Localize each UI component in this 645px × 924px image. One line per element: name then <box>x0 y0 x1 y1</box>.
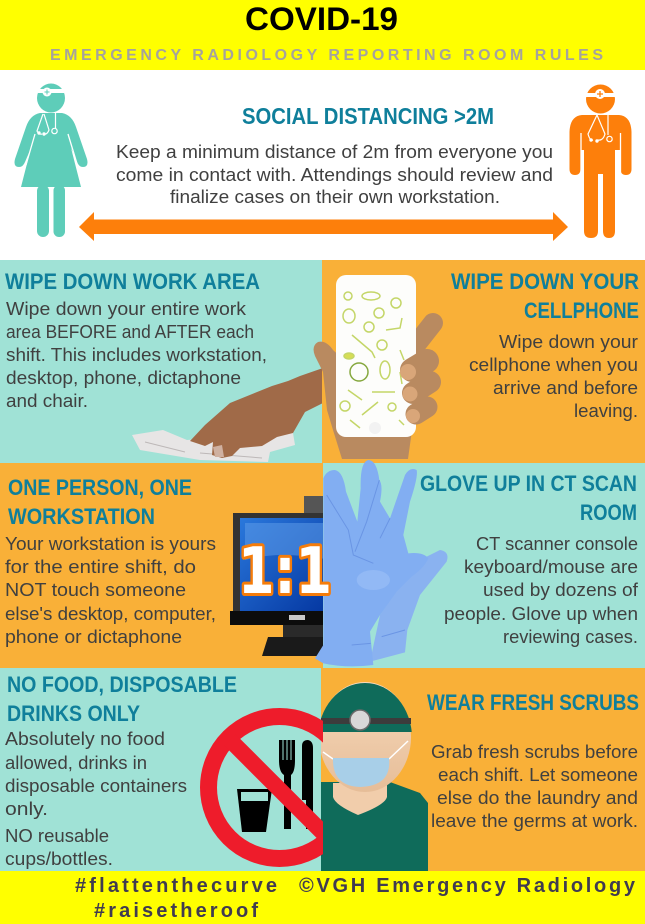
text: wipe work area body: desktop, phone, dictaphone <box>6 367 241 388</box>
text: wipe work area body: area BEFORE and AFTER each <box>6 321 254 342</box>
text: workstation body <box>5 533 216 647</box>
text: wipe work area body: Wipe down your entire work <box>6 298 247 319</box>
text: cellphone heading <box>451 269 639 323</box>
text: scrubs body <box>431 741 638 831</box>
text: no food body: NO reusable <box>5 825 109 846</box>
text: no food heading <box>7 672 237 726</box>
icon: male doctor <box>570 84 632 238</box>
icon: hand wiping with tissue <box>132 368 323 462</box>
subtitle: EMERGENCY RADIOLOGY REPORTING ROOM RULES <box>50 47 603 64</box>
text: wipe work area heading: WIPE DOWN WORK AREA <box>5 269 260 294</box>
label: 1:1 badge: 1:1 <box>238 535 332 609</box>
text: cellphone body: cellphone when you <box>469 354 638 375</box>
text: wipe work area body: and chair. <box>6 390 88 411</box>
text: workstation heading: WORKSTATION <box>8 504 155 529</box>
text: glove body: used by dozens of <box>483 579 639 600</box>
text: glove body: keyboard/mouse are <box>464 556 638 577</box>
text: social distancing line 1: Keep a minimum distance of 2m from everyone you <box>116 141 553 162</box>
text: wipe work area body: shift. This includes workstation, <box>6 344 267 365</box>
text: glove body <box>444 533 639 647</box>
text: scrubs body: each shift. Let someone <box>438 764 638 785</box>
panel: no food disposable drinks only <box>0 668 322 871</box>
icon: computer monitor <box>230 496 323 656</box>
text: no food body: disposable containers <box>5 775 187 796</box>
text: hashtag raise the roof: #raisetheroof <box>94 900 258 922</box>
panel: wipe down your cellphone <box>314 260 645 463</box>
text: no food body: cups/bottles. <box>5 848 113 869</box>
title: COVID-19 <box>245 1 398 37</box>
panel: glove up in CT scan room <box>238 460 645 668</box>
icon: surgeon with mask <box>318 682 428 871</box>
text: social distancing heading: SOCIAL DISTANCING >2M <box>242 103 494 129</box>
panel: wear fresh scrubs <box>318 668 645 871</box>
text: social distancing line 3: finalize cases on their own workstation. <box>170 186 500 207</box>
text: workstation heading <box>8 475 192 529</box>
text: no food heading: DRINKS ONLY <box>7 701 140 726</box>
text: glove body: reviewing cases. <box>503 626 638 647</box>
text: cellphone body: Wipe down your <box>499 331 638 352</box>
text: workstation body: NOT touch someone <box>5 579 186 600</box>
text: workstation body: Your workstation is yours <box>5 533 216 554</box>
text: glove heading <box>420 471 637 525</box>
text: cellphone body: leaving. <box>574 400 638 421</box>
icon: blue gloves <box>315 460 447 666</box>
text: cellphone body <box>469 331 638 421</box>
panel: wipe down work area <box>0 260 323 463</box>
text: wipe work area body <box>6 298 267 411</box>
text: no food heading: NO FOOD, DISPOSABLE <box>7 672 237 697</box>
text: workstation body: for the entire shift, do <box>5 556 196 577</box>
icon: no food or drink sign <box>208 716 350 858</box>
text: glove body: CT scanner console <box>476 533 638 554</box>
panel: social distancing <box>0 70 645 260</box>
text: no food body: only. <box>5 798 48 819</box>
text: glove body: people. Glove up when <box>444 603 638 624</box>
text: hashtag flatten the curve: #flattenthecurve <box>75 875 277 897</box>
header band <box>0 0 645 70</box>
text: cellphone body: arrive and before <box>493 377 638 398</box>
text: social distancing line 2: come in contact with. Attendings should review and <box>116 164 553 185</box>
text: scrubs body: else do the laundry and <box>437 787 638 808</box>
icon: hand holding phone with germs <box>314 275 433 459</box>
text: no food body: allowed, drinks in <box>5 752 147 773</box>
text: scrubs body: Grab fresh scrubs before <box>431 741 638 762</box>
text: workstation body: phone or dictaphone <box>5 626 182 647</box>
text: scrubs body: leave the germs at work. <box>431 810 638 831</box>
text: no food body <box>5 728 187 869</box>
text: workstation heading: ONE PERSON, ONE <box>8 475 192 500</box>
icon: female doctor <box>14 84 88 237</box>
text: no food body: Absolutely no food <box>5 728 165 749</box>
footer band <box>0 871 645 924</box>
text: credit: ©VGH Emergency Radiology <box>299 875 636 897</box>
arrow: double headed distance <box>79 212 568 241</box>
panel: one person one workstation <box>0 463 334 668</box>
text: workstation body: else's desktop, computer, <box>5 603 216 624</box>
